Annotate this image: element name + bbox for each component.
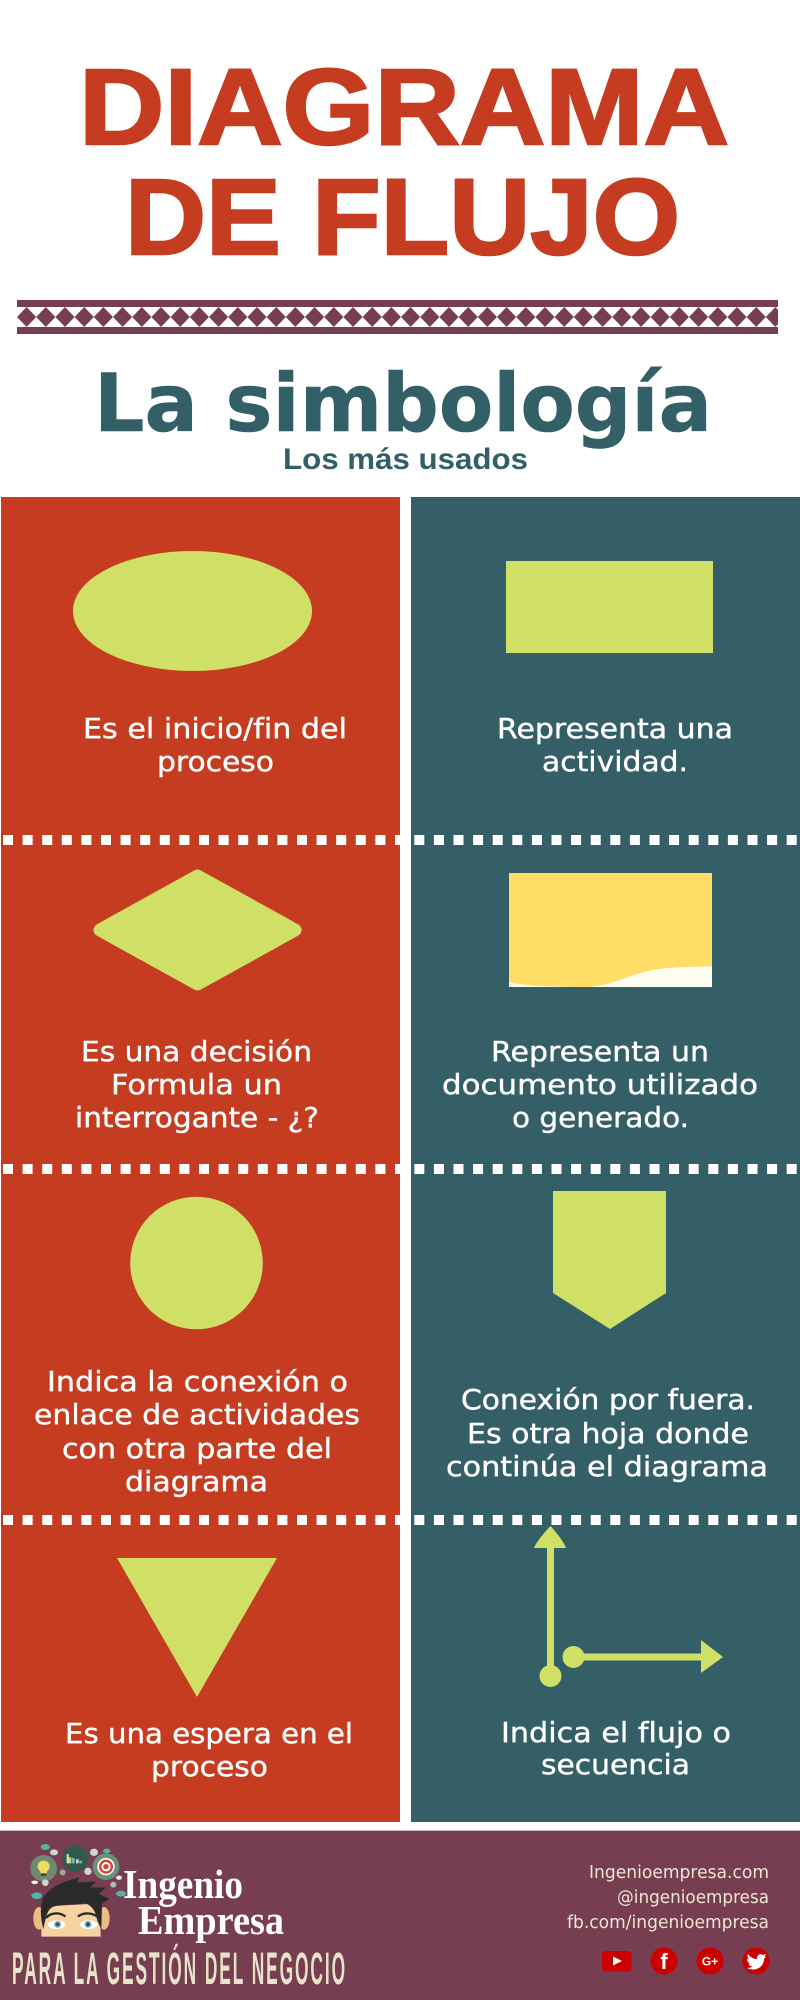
face (41, 1903, 101, 1937)
logo wordmark: Ingenio (123, 1861, 243, 1907)
text: start/end: Es el inicio/fin del (83, 713, 347, 745)
text: connector: diagrama (125, 1466, 268, 1498)
text: activity: actividad. (542, 746, 688, 778)
subtitle: Los más usados: Los más usados (283, 443, 528, 476)
symbol: document (509, 873, 712, 987)
icon: facebook: f (660, 1949, 668, 1974)
decorative diamond band (17, 300, 778, 334)
text: wait: Es una espera en el (65, 1718, 353, 1750)
symbol: flow arrows (534, 1526, 723, 1687)
text: document: Representa un (491, 1036, 709, 1068)
symbol: ellipse start/end (73, 551, 312, 671)
eyes (48, 1920, 97, 1929)
panel: footer (0, 1830, 800, 2000)
arrow: horizontal (562, 1640, 723, 1673)
text: flow: secuencia (541, 1749, 690, 1781)
icon: google plus (696, 1948, 724, 1974)
icon: twitter (742, 1948, 770, 1974)
text: document: o generado. (512, 1102, 689, 1134)
title: DE FLUJO (125, 156, 680, 277)
text: off-page connector: continúa el diagrama (446, 1451, 768, 1483)
text: connector: con otra parte del (62, 1433, 332, 1465)
text: off-page connector (446, 1384, 768, 1483)
hair (41, 1877, 109, 1929)
text: start/end (83, 713, 347, 778)
icon: facebook (650, 1948, 678, 1974)
panel: teal column (411, 497, 800, 1822)
contact details: @ingenioempresa (617, 1888, 769, 1908)
text: decision: interrogante - ¿? (75, 1102, 319, 1134)
text: document (442, 1036, 758, 1134)
text: wait: proceso (151, 1751, 268, 1783)
symbol: circle connector (130, 1197, 263, 1329)
text: start/end: proceso (157, 746, 274, 778)
text: wait (65, 1718, 353, 1783)
text: document: documento utilizado (442, 1069, 758, 1101)
text: decision (75, 1036, 319, 1134)
symbol: rectangle activity (506, 561, 713, 653)
text: connector: enlace de actividades (34, 1399, 360, 1431)
text: activity (497, 713, 733, 778)
symbol: rounded diamond decision (100, 876, 295, 984)
text: connector (34, 1366, 360, 1498)
title: DIAGRAMA (79, 46, 729, 167)
contact details: Ingenioempresa.com (589, 1863, 769, 1883)
icon: google plus: G+ (702, 1954, 718, 1968)
text: off-page connector: Conexión por fuera. (461, 1384, 755, 1416)
eyebrows (47, 1913, 99, 1918)
icon: youtube (602, 1951, 632, 1972)
arrow: vertical (534, 1526, 566, 1687)
text: flow: Indica el flujo o (501, 1717, 731, 1749)
ears (33, 1907, 110, 1930)
contact details (567, 1863, 769, 1933)
logo wordmark (123, 1861, 284, 1943)
symbol: inverted triangle wait (117, 1558, 277, 1697)
symbol: off-page connector (553, 1191, 666, 1329)
logo wordmark: Empresa (138, 1897, 284, 1943)
text: connector: Indica la conexión o (47, 1366, 348, 1398)
text: decision: Formula un (111, 1069, 282, 1101)
text: activity: Representa una (497, 713, 733, 745)
panel: red column (1, 497, 400, 1822)
idea bubbles (30, 1844, 126, 1899)
text: off-page connector: Es otra hoja donde (467, 1418, 749, 1450)
text: flow (501, 1717, 731, 1781)
title (79, 46, 729, 277)
subtitle: La simbología: La simbología (94, 357, 712, 450)
logo: thinking character (30, 1844, 126, 1937)
contact details: fb.com/ingenioempresa (567, 1913, 769, 1933)
text: decision: Es una decisión (81, 1036, 312, 1068)
